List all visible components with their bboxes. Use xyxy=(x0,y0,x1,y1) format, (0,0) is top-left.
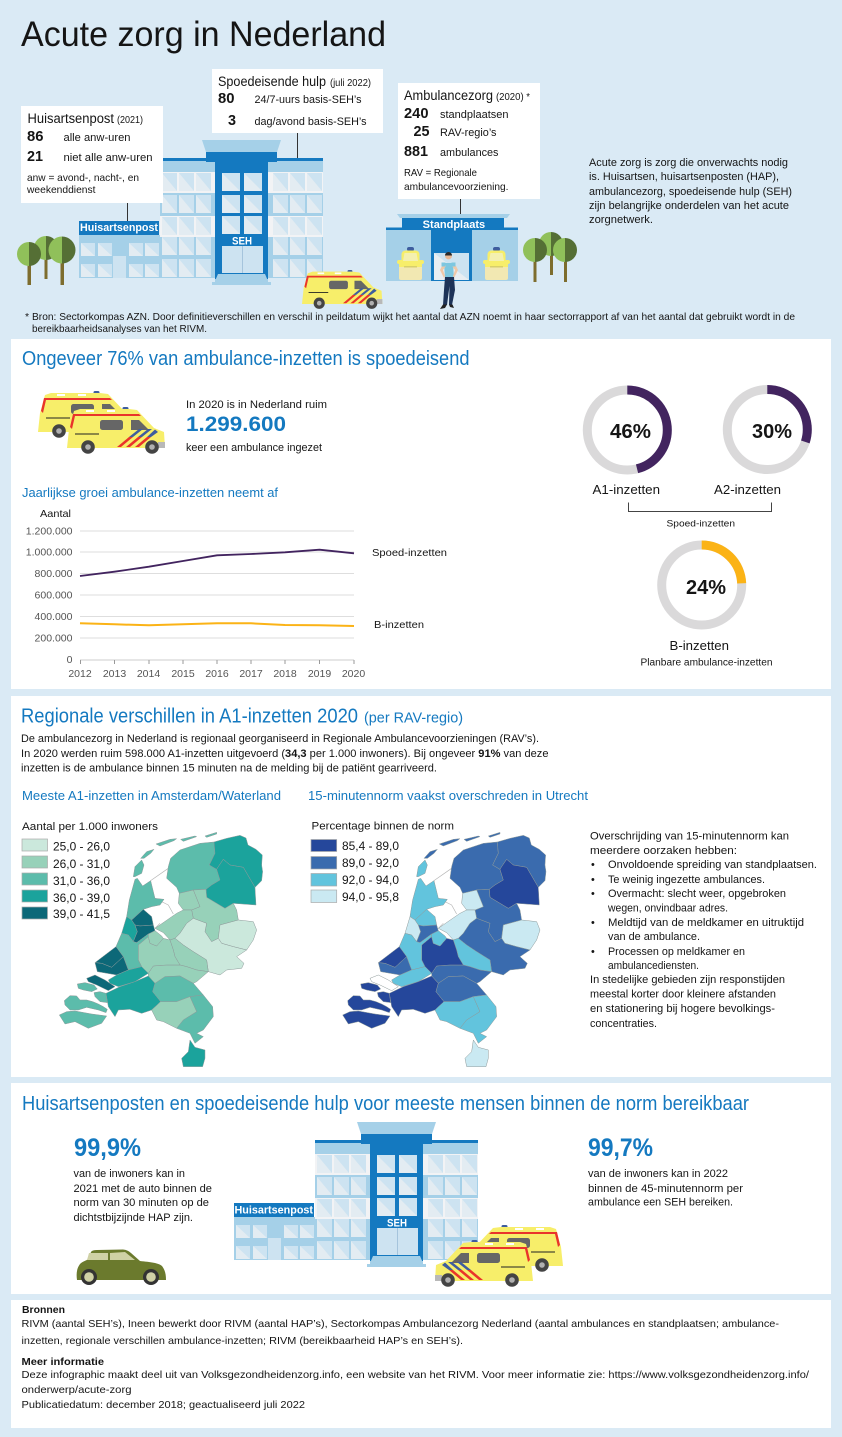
stat: GP post xyxy=(74,1134,212,1224)
line chart: Aantal xyxy=(40,508,71,520)
key figure: In 2020 is in Nederland ruim xyxy=(186,399,327,411)
text block: causes of exceeding the norm: wegen, onvindbaar adres. xyxy=(607,903,728,915)
line chart: 2016 xyxy=(205,668,229,680)
key figure: 1.299.600 xyxy=(186,413,286,436)
legend: map 2: 94,0 - 95,8 xyxy=(342,890,399,904)
intro text: zijn belangrijke onderdelen van het acute xyxy=(589,200,789,212)
line chart: 2015 xyxy=(171,668,195,680)
text block: causes of exceeding the norm: meerdere oorzaken hebben: xyxy=(590,845,737,857)
donut: A1: 46% xyxy=(610,421,651,443)
text block: causes of exceeding the norm: • xyxy=(591,859,595,871)
text block: causes of exceeding the norm: Processen op meldkamer en xyxy=(608,946,745,958)
intro paragraph xyxy=(21,733,548,775)
text block: causes of exceeding the norm: In stedelijke gebieden zijn responstijden xyxy=(590,974,785,986)
text block: causes of exceeding the norm: en stationering bij hogere bevolkings- xyxy=(590,1003,775,1015)
callout: Huisartsenpost: (2021) xyxy=(117,115,143,126)
stat: GP post: norm van 30 minuten op de xyxy=(74,1197,209,1209)
sub-heading: map 2: 15-minutennorm vaakst overschreden in Utrecht xyxy=(308,788,588,803)
key figure: keer een ambulance ingezet xyxy=(186,442,322,454)
stat: emergency care: ambulance een SEH bereiken. xyxy=(588,1196,733,1208)
stat: emergency care xyxy=(588,1134,743,1208)
meer informatie: Meer informatie xyxy=(22,1356,104,1368)
callout: Ambulancezorg: 25 xyxy=(414,123,430,140)
meer informatie: onderwerp/acute-zorg xyxy=(22,1384,132,1396)
callout: Ambulancezorg: ambulances xyxy=(440,147,499,159)
bronnen: Bronnen xyxy=(22,1304,65,1316)
line chart: 1.000.000 xyxy=(26,546,73,558)
callout: Huisartsenpost: 21 xyxy=(27,148,43,165)
callout: Spoedeisende hulp: 80 xyxy=(218,90,234,107)
intro paragraph: inzetten is de ambulance binnen 15 minuten na de melding bij de patiënt gearriveerd. xyxy=(21,763,437,775)
text block: causes of exceeding the norm xyxy=(590,830,817,1030)
meer informatie xyxy=(22,1356,809,1411)
line chart: 0 xyxy=(67,654,73,666)
icon: car xyxy=(77,1250,166,1285)
text block: causes of exceeding the norm: Te weinig ingezette ambulances. xyxy=(608,874,765,886)
illustration: hospital and GP post xyxy=(79,140,323,285)
text block: causes of exceeding the norm: Meldtijd van de meldkamer en uitruktijd xyxy=(608,917,804,929)
callout: Ambulancezorg: ambulancevoorziening. xyxy=(404,181,508,193)
line chart: 2013 xyxy=(103,668,126,680)
footnote: Bron: Sectorkompas AZN. Door definitieverschillen en verschil in peildatum wijkt het aantal dat AZN noemt in haar sectorrapport af van het aantal dat gebruikt wordt in de xyxy=(32,311,795,323)
line chart: 800.000 xyxy=(35,568,73,580)
stat: GP post: dichtstbijzijnde HAP zijn. xyxy=(74,1212,193,1224)
text block: causes of exceeding the norm: • xyxy=(591,888,595,900)
heading: (per RAV-regio) xyxy=(364,711,463,727)
connector lines xyxy=(128,133,460,221)
stat: GP post: 2021 met de auto binnen de xyxy=(74,1183,212,1195)
text block: causes of exceeding the norm: • xyxy=(591,917,595,929)
donut: A2: 30% xyxy=(752,421,792,443)
intro text: Acute zorg is zorg die onverwachts nodig xyxy=(589,157,788,169)
illustration: ambulance station xyxy=(386,214,518,281)
callout: Spoedeisende hulp: Spoedeisende hulp xyxy=(218,74,326,89)
key figure xyxy=(186,399,327,454)
callout: Huisartsenpost: 86 xyxy=(27,128,44,145)
legend: map 1: 25,0 - 26,0 xyxy=(53,840,110,854)
legend: map 2: 85,4 - 89,0 xyxy=(342,839,399,853)
callout: Spoedeisende hulp: dag/avond basis-SEH’s xyxy=(254,116,367,128)
map: percentage within norm xyxy=(343,832,546,1067)
meer informatie: Deze infographic maakt deel uit van Volksgezondheidenzorg.info, een website van het RIVM. Voor meer informatie zie: https://www.volksgezondheidenzorg.info/ xyxy=(22,1369,809,1381)
callout: Ambulancezorg: (2020) * xyxy=(496,92,530,103)
text block: causes of exceeding the norm: • xyxy=(591,946,595,958)
stat: emergency care: binnen de 45-minutennorm per xyxy=(588,1183,743,1195)
callout: Huisartsenpost: niet alle anw-uren xyxy=(64,152,152,164)
line chart: 2019 xyxy=(308,668,331,680)
line chart: B-inzetten xyxy=(374,619,424,631)
callout: Huisartsenpost: weekenddienst xyxy=(26,184,96,196)
line chart: 2014 xyxy=(137,668,160,680)
legend: map 2: 92,0 - 94,0 xyxy=(342,873,399,887)
heading: Huisartsenposten en spoedeisende hulp voor meeste mensen binnen de norm bereikbaar xyxy=(22,1093,749,1115)
stat: GP post: 99,9% xyxy=(74,1134,141,1162)
intro text: zorgnetwerk. xyxy=(589,214,653,226)
intro text: is. Huisartsen, huisartsenposten (HAP), xyxy=(589,171,779,183)
text block: causes of exceeding the norm: concentraties. xyxy=(590,1018,657,1030)
legend: map 2: 89,0 - 92,0 xyxy=(342,856,399,870)
illustration: hospital and GP post: Huisartsenpost xyxy=(80,222,158,234)
donut: B: 24% xyxy=(686,577,726,599)
panel: sources xyxy=(11,1300,831,1428)
text block: causes of exceeding the norm: Onvoldoende spreiding van standplaatsen. xyxy=(608,859,817,871)
callout: Huisartsenpost xyxy=(21,106,163,203)
line chart: 400.000 xyxy=(35,611,73,623)
title: Acute zorg in Nederland xyxy=(21,15,386,54)
text block: causes of exceeding the norm: Overschrijding van 15-minutennorm kan xyxy=(590,830,789,842)
icon: two ambulances xyxy=(38,391,165,454)
callout: Ambulancezorg: 240 xyxy=(404,105,428,122)
bronnen xyxy=(22,1304,780,1347)
callout: Huisartsenpost: anw = avond-, nacht-, en xyxy=(27,172,139,184)
legend: map 1: 26,0 - 31,0 xyxy=(53,857,110,871)
callout: Ambulancezorg: Ambulancezorg xyxy=(404,88,493,103)
legend: map 2 xyxy=(311,820,454,904)
icon: two ambulances xyxy=(435,1225,563,1287)
line chart xyxy=(26,508,447,680)
illustration: trees right xyxy=(523,232,577,282)
meer informatie: Publicatiedatum: december 2018; geactualiseerd juli 2022 xyxy=(22,1399,305,1411)
donut: A1 xyxy=(587,390,667,497)
line chart: 200.000 xyxy=(35,632,73,644)
line chart: 1.200.000 xyxy=(26,526,73,538)
legend: map 1: 39,0 - 41,5 xyxy=(53,907,110,921)
chart heading: Jaarlijkse groei ambulance-inzetten neemt af xyxy=(22,485,278,500)
callout: Ambulancezorg: standplaatsen xyxy=(440,109,508,121)
intro paragraph: De ambulancezorg in Nederland is regionaal georganiseerd in Regionale Ambulancevoorzieningen (RAV’s). xyxy=(21,733,539,745)
intro text: ambulancezorg, spoedeisende hulp (SEH) xyxy=(589,186,792,198)
callout: Ambulancezorg: RAV-regio’s xyxy=(440,127,497,139)
text block: causes of exceeding the norm: ambulancediensten. xyxy=(608,960,699,972)
donut: A2 xyxy=(714,390,807,497)
line chart: 2017 xyxy=(239,668,263,680)
bracket: spoed-inzetten xyxy=(628,502,772,530)
text block: causes of exceeding the norm: van de ambulance. xyxy=(608,931,700,943)
bronnen: RIVM (aantal SEH’s), Ineen bewerkt door RIVM (aantal HAP’s), Sectorkompas Ambulancezorg Nederland (aantal ambulances en standplaatsen; ambulance- xyxy=(22,1318,780,1330)
callout: Spoedeisende hulp: 3 xyxy=(228,112,236,129)
callout: Spoedeisende hulp: 24/7-uurs basis-SEH’s xyxy=(254,94,362,106)
heading: Ongeveer 76% van ambulance-inzetten is spoedeisend xyxy=(22,348,470,370)
legend: map 2: Percentage binnen de norm xyxy=(312,820,454,832)
sub-heading: map 1: Meeste A1-inzetten in Amsterdam/Waterland xyxy=(22,788,281,803)
donut: A1: A1-inzetten xyxy=(592,483,660,497)
donut: B: Planbare ambulance-inzetten xyxy=(640,658,772,669)
callout: Ambulancezorg: RAV = Regionale xyxy=(404,167,477,179)
text block: causes of exceeding the norm: Overmacht: slecht weer, opgebroken xyxy=(608,888,786,900)
line chart: 2018 xyxy=(273,668,297,680)
line chart: 2012 xyxy=(68,668,92,680)
intro paragraph: In 2020 werden ruim 598.000 A1-inzetten uitgevoerd ( 34,3 per 1.000 inwoners). Bij ongeveer 91% van deze xyxy=(21,748,548,760)
illustration: trees left xyxy=(17,236,76,285)
illustration: hospital and GP post: SEH xyxy=(387,1218,407,1230)
donut: B xyxy=(640,545,772,669)
line chart: 600.000 xyxy=(35,590,73,602)
illustration: hospital and GP post: Huisartsenpost xyxy=(234,1204,313,1216)
panel: accessibility xyxy=(11,1083,831,1294)
footnote: * xyxy=(25,311,29,323)
illustration: ambulance station: Standplaats xyxy=(423,219,485,231)
line chart: Spoed-inzetten xyxy=(372,547,447,559)
intro text xyxy=(589,157,792,226)
line chart: 2020 xyxy=(342,668,365,680)
map: A1 deployments per 1000 inhabitants xyxy=(59,832,263,1067)
illustration: ambulance xyxy=(302,270,382,309)
stat: emergency care: van de inwoners kan in 2022 xyxy=(588,1168,728,1180)
heading: Regionale verschillen in A1-inzetten 2020 xyxy=(21,706,358,728)
legend: map 1: 31,0 - 36,0 xyxy=(53,874,110,888)
donut: B: B-inzetten xyxy=(670,639,729,653)
illustration: person xyxy=(440,252,458,309)
illustration: hospital and GP post xyxy=(234,1122,478,1267)
legend: map 1: Aantal per 1.000 inwoners xyxy=(22,821,159,833)
callout: Spoedeisende hulp: (juli 2022) xyxy=(330,78,371,89)
footnote xyxy=(25,311,795,335)
legend: map 1: 36,0 - 39,0 xyxy=(53,891,110,905)
text block: causes of exceeding the norm: meestal korter door kleinere afstanden xyxy=(590,989,776,1001)
panel: ambulance deployments xyxy=(11,339,831,689)
bracket: spoed-inzetten: Spoed-inzetten xyxy=(666,519,735,530)
stat: GP post: van de inwoners kan in xyxy=(74,1168,185,1180)
panel: regional differences xyxy=(11,696,831,1077)
callout: Ambulancezorg xyxy=(398,83,540,199)
callout: Spoedeisende hulp xyxy=(212,69,383,133)
illustration: hospital and GP post: SEH xyxy=(232,236,252,248)
bronnen: inzetten, regionale verschillen ambulance-inzetten; RIVM (bereikbaarheid HAP’s en SEH’s). xyxy=(22,1335,463,1347)
stat: emergency care: 99,7% xyxy=(588,1134,653,1162)
callout: Ambulancezorg: 881 xyxy=(404,143,428,160)
footnote: bereikbaarheidsanalyses van het RIVM. xyxy=(32,323,207,335)
legend: map 1 xyxy=(22,821,159,921)
text block: causes of exceeding the norm: • xyxy=(591,874,595,886)
callout: Huisartsenpost: Huisartsenpost xyxy=(28,111,114,126)
callout: Huisartsenpost: alle anw-uren xyxy=(64,132,130,144)
donut: A2: A2-inzetten xyxy=(714,483,781,497)
